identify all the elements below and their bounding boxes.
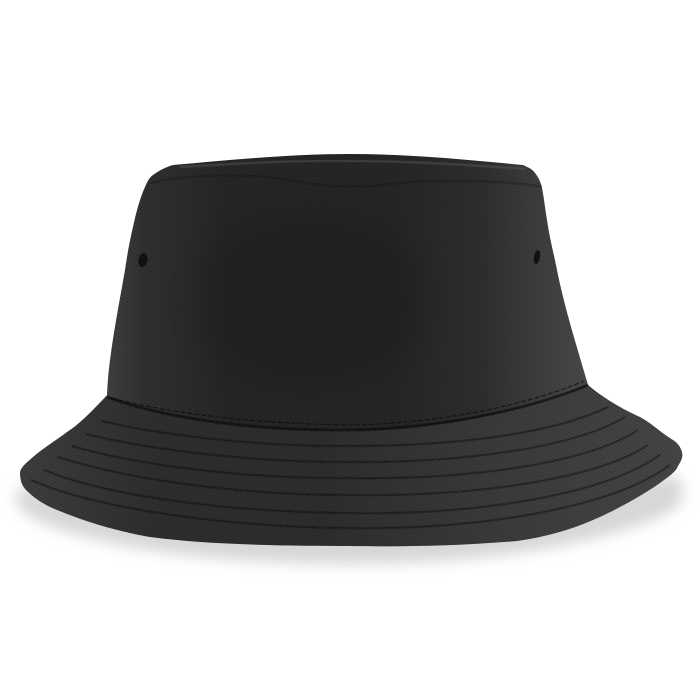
left eyelet (137, 252, 149, 268)
ground shadow (16, 475, 683, 564)
crown top stitching (150, 175, 542, 187)
dark centre shading (190, 210, 430, 390)
crown (107, 154, 588, 431)
crown fabric texture (107, 154, 588, 431)
brim fabric texture (20, 385, 682, 546)
band stitching (112, 381, 584, 425)
brim shape (20, 385, 682, 546)
right eyelet (533, 250, 541, 264)
crown shape (107, 154, 588, 431)
band seam line (107, 385, 588, 430)
brim stitching rows (31, 407, 670, 528)
crown top lip highlight (180, 161, 525, 169)
brim (20, 385, 682, 546)
